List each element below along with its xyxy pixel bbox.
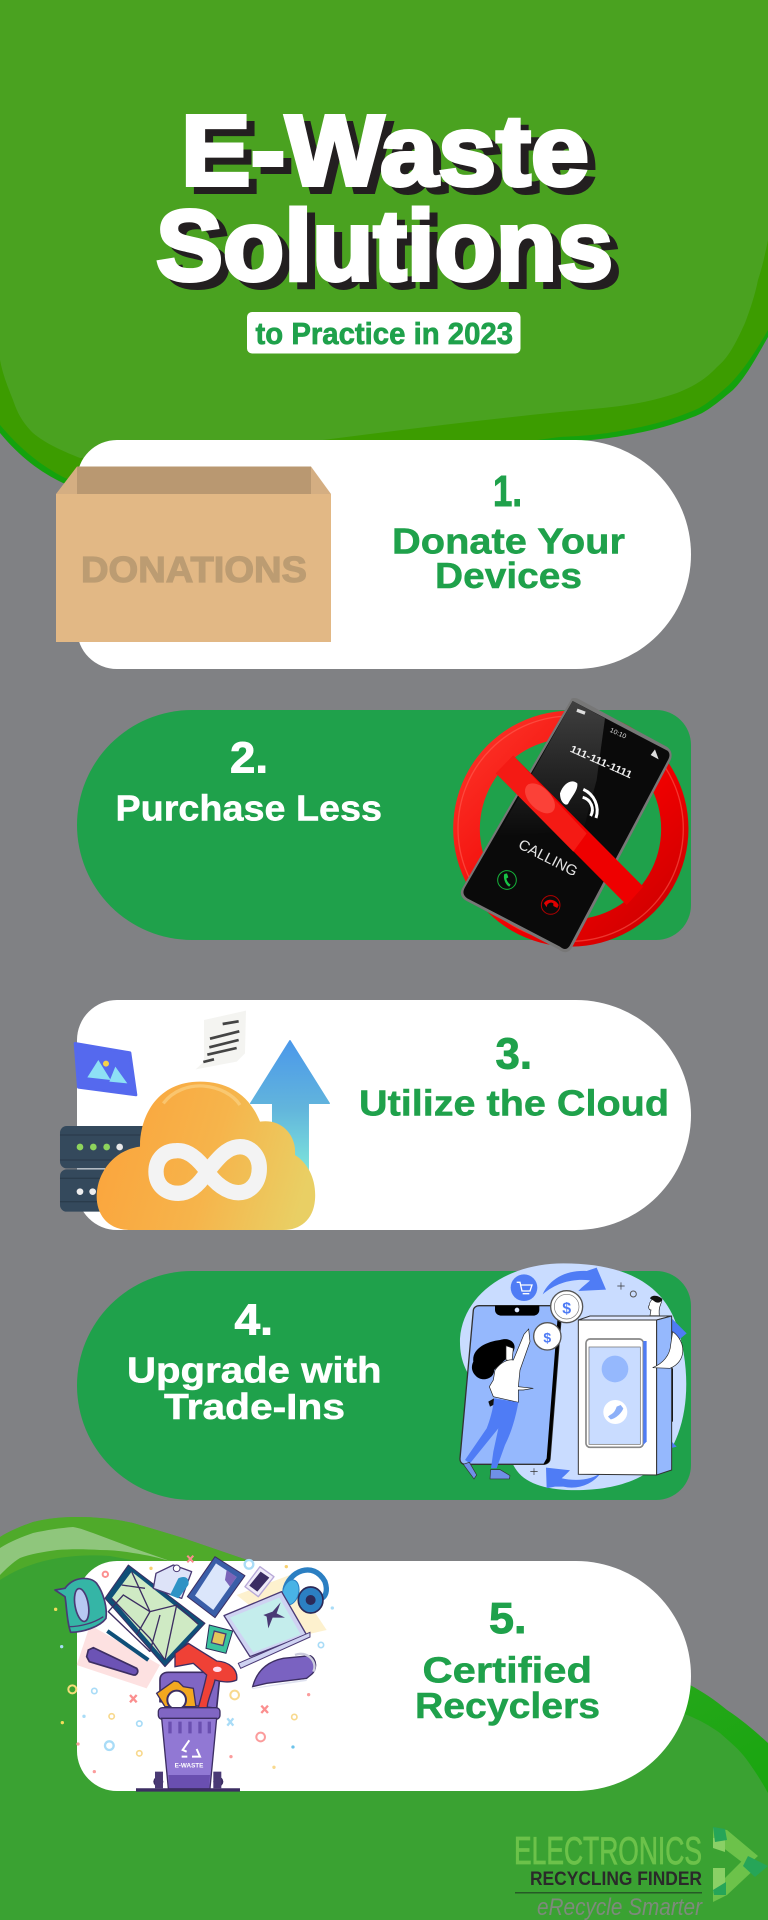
icon: cloud storage: [60, 1011, 329, 1230]
bin: [160, 1672, 219, 1708]
icon: no phone: 10:10: [609, 727, 627, 741]
icon: phone trade-in: [460, 1263, 687, 1490]
subtitle badge: to Practice in 2023: [256, 316, 513, 351]
logo: electronics recycling finder: [514, 1827, 768, 1920]
panel: step 3 cloud: [60, 1000, 691, 1230]
icon: donations box: DONATIONS: [81, 549, 307, 590]
title: E-Waste: [181, 95, 589, 207]
chip: [206, 1625, 233, 1653]
icon: no phone: [453, 698, 688, 952]
broken tablet: [187, 1557, 245, 1618]
step 1 number: 1.: [493, 467, 522, 516]
title: Solutions: [156, 190, 613, 302]
laptop: [224, 1592, 307, 1657]
icon: e-waste bin: E-WASTE: [175, 1763, 203, 1770]
panel: step 5 certified recyclers: [54, 1556, 691, 1791]
step 1 label: Donate Your: [392, 520, 625, 562]
camera: [153, 1565, 192, 1598]
logo: electronics recycling finder: RECYCLING FINDER: [530, 1869, 702, 1890]
icon: no phone: 111-111-1111: [568, 744, 634, 781]
step 5 number: 5.: [489, 1594, 526, 1643]
icon: chevron logo: [713, 1827, 768, 1902]
shattered tablet: [105, 1565, 205, 1667]
confetti: [103, 1572, 108, 1577]
flashlight: [87, 1648, 138, 1675]
headphones: [285, 1570, 326, 1598]
title: Solutions: [164, 197, 621, 309]
bottom green blob: [0, 1517, 768, 1920]
iron: [253, 1656, 316, 1687]
kettle: [55, 1578, 106, 1632]
step 5 label: Certified: [422, 1650, 592, 1690]
step 3 number: 3.: [496, 1030, 532, 1078]
icon: phone trade-in: $: [543, 1329, 551, 1345]
step 2 label: Purchase Less: [116, 788, 382, 828]
panel: step 1 donate: [56, 440, 691, 669]
step 4 number: 4.: [234, 1296, 273, 1344]
step 3 label: Utilize the Cloud: [359, 1082, 669, 1124]
step 5 label: Recyclers: [415, 1685, 600, 1726]
step 4 label: Trade-Ins: [164, 1386, 345, 1427]
icon: phone trade-in: $: [562, 1300, 571, 1317]
title: [156, 95, 621, 309]
step 1 label: Devices: [435, 555, 582, 596]
top green blob: [0, 0, 768, 500]
icon: e-waste bin: [54, 1556, 334, 1790]
icon: donations box: [56, 466, 331, 642]
phone: [245, 1567, 274, 1597]
panel: step 4 trade-ins: [77, 1263, 691, 1500]
panel: step 2 purchase less: [77, 698, 691, 952]
step 4 label: Upgrade with: [127, 1350, 382, 1390]
title: E-Waste: [189, 102, 597, 214]
step 2 number: 2.: [230, 734, 268, 782]
icon: no phone: CALLING: [516, 837, 580, 880]
